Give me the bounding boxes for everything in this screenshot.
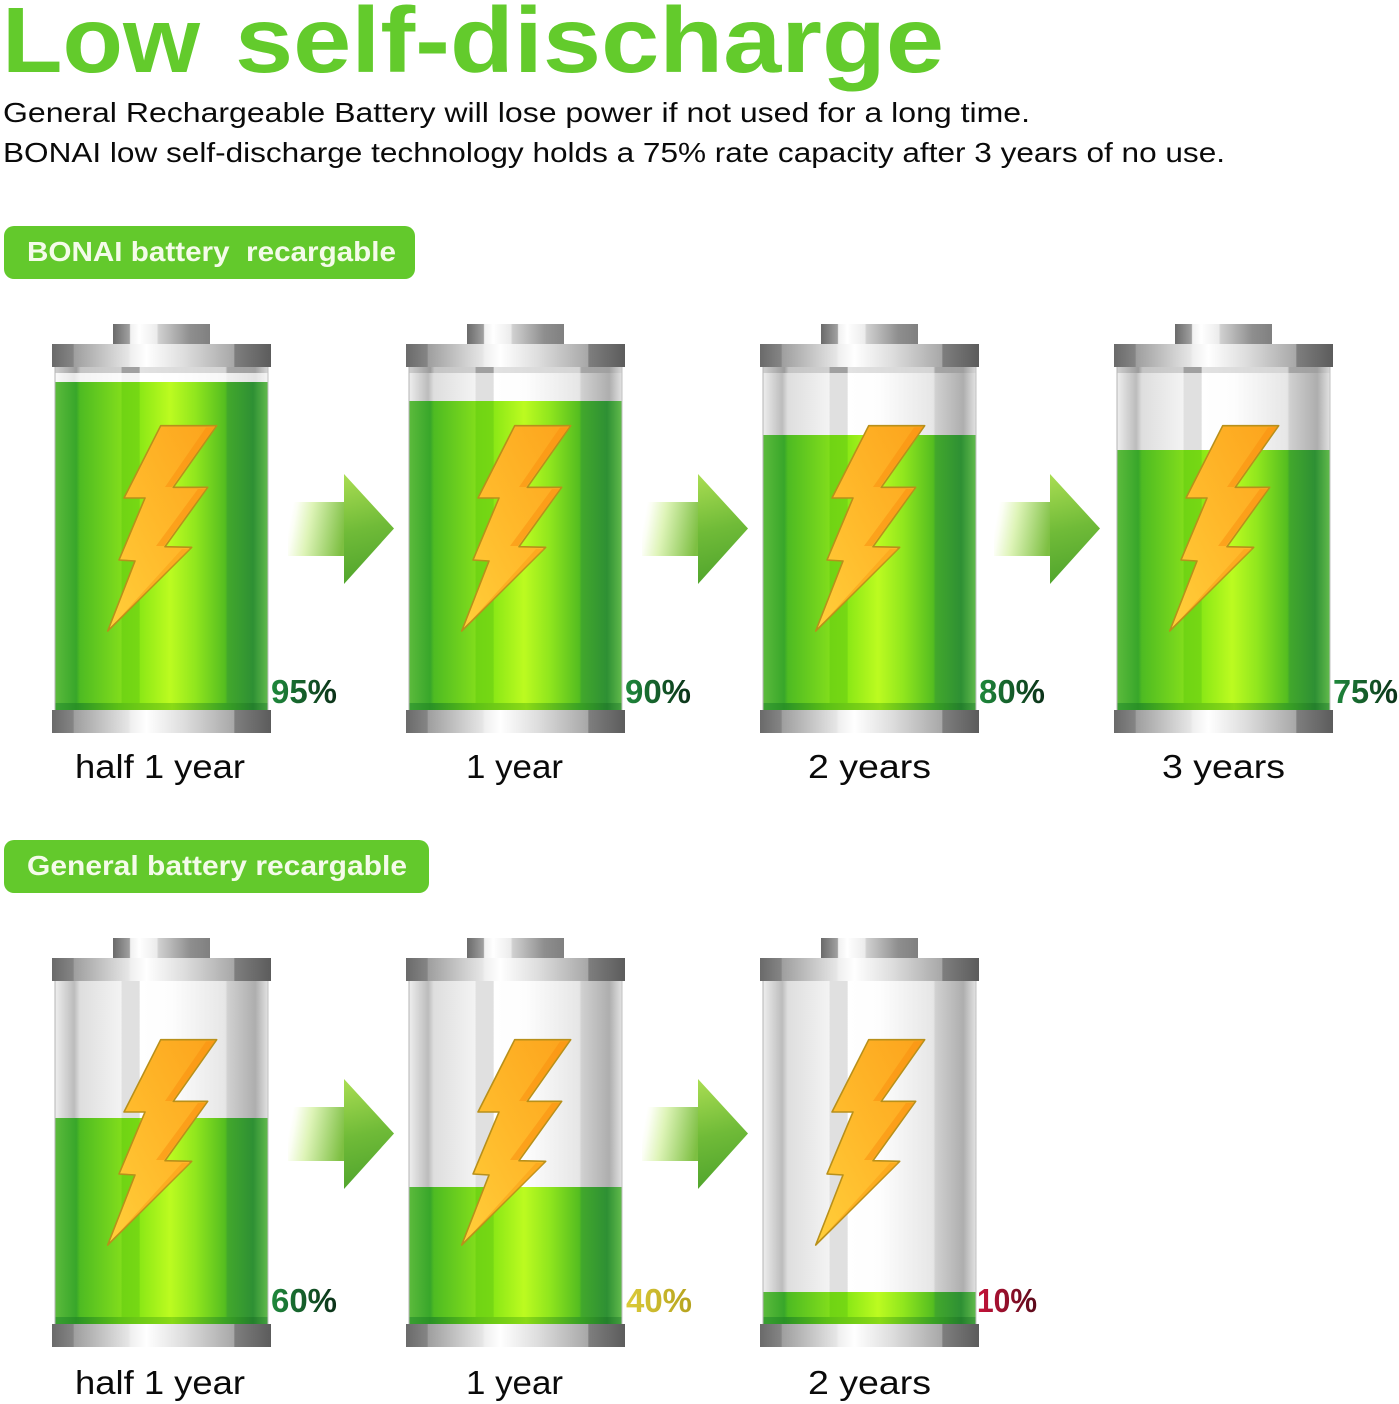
heading: BONAI battery: [4, 226, 415, 279]
battery: BONAI half 1 year 95%: 95%: [271, 673, 337, 710]
battery: BONAI half 1 year 95%: half 1 year: [75, 748, 245, 785]
intro text: General Rechargeable Battery will lose power if not used for a long time.: [3, 97, 1030, 128]
heading: General battery: General battery recargable: [27, 850, 407, 881]
heading: General battery: [4, 840, 429, 893]
heading: BONAI battery: BONAI battery recargable: [27, 236, 396, 267]
arrow: [288, 1079, 394, 1189]
battery: General half 1 year 60%: half 1 year: [75, 1364, 245, 1401]
battery: General 2 years 10%: [760, 938, 1037, 1401]
battery: General 2 years 10%: 10%: [977, 1282, 1037, 1319]
battery: BONAI 2 years 80%: [760, 324, 1045, 785]
intro text: [3, 97, 1225, 168]
battery: BONAI 2 years 80%: 2 years: [808, 748, 931, 785]
arrow: [994, 474, 1100, 584]
battery: General 2 years 10%: 2 years: [808, 1364, 931, 1401]
arrow: [288, 474, 394, 584]
battery: BONAI 1 year 90%: [406, 324, 691, 785]
battery: BONAI half 1 year 95%: [52, 324, 337, 785]
battery: BONAI 3 years 75%: 75%: [1333, 673, 1398, 710]
battery: BONAI 1 year 90%: 1 year: [466, 748, 563, 785]
battery: General 1 year 40%: [406, 938, 692, 1401]
battery: BONAI 1 year 90%: 90%: [625, 673, 691, 710]
title: [2, 0, 944, 92]
arrow: [642, 474, 748, 584]
battery: BONAI 2 years 80%: 80%: [979, 673, 1045, 710]
battery: General 1 year 40%: 40%: [626, 1282, 692, 1319]
battery: General 1 year 40%: 1 year: [466, 1364, 563, 1401]
battery: BONAI 3 years 75%: [1114, 324, 1398, 785]
battery: General half 1 year 60%: 60%: [271, 1282, 337, 1319]
arrow: [642, 1079, 748, 1189]
battery: BONAI 3 years 75%: 3 years: [1162, 748, 1285, 785]
intro text: BONAI low self-discharge technology holds a 75% rate capacity after 3 years of no use.: [3, 137, 1225, 168]
battery: General half 1 year 60%: [52, 938, 337, 1401]
